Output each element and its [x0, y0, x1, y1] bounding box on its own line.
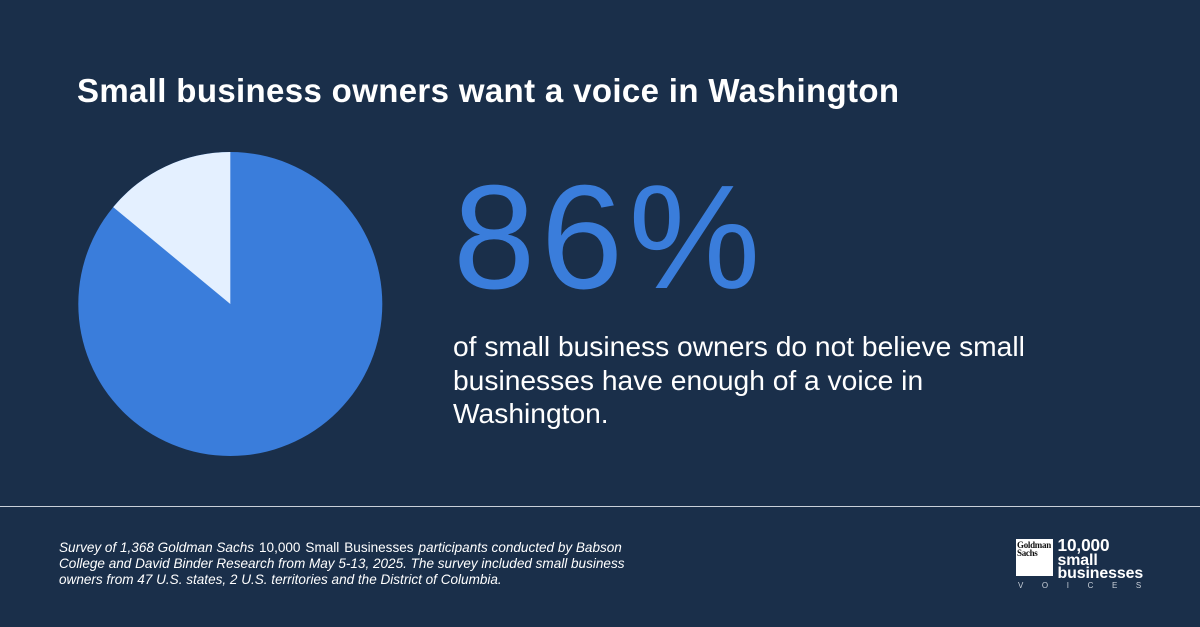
- statistic description: businesses have enough of a voice in: [453, 364, 923, 396]
- footnote: owners from 47 U.S. states, 2 U.S. territories and the District of Columbia.: [59, 572, 502, 587]
- statistic description: Washington.: [453, 397, 609, 429]
- statistic description: of small business owners do not believe small: [453, 330, 1025, 362]
- big statistic: 86%: [453, 155, 766, 320]
- logo: program name: businesses: [1058, 565, 1143, 582]
- statistic description: [453, 330, 1025, 429]
- logo: Goldman Sachs 10,000 Small Businesses Voices: [1016, 535, 1160, 590]
- footnote: College and David Binder Research from May 5-13, 2025. The survey included small business: [59, 556, 624, 571]
- footnote: [59, 540, 624, 587]
- logo: program name: 10,000: [1058, 535, 1109, 555]
- divider: [0, 506, 1200, 507]
- logo: voices: VOICES: [1018, 581, 1160, 590]
- logo: Goldman Sachs square: Goldman: [1017, 540, 1051, 550]
- logo: Goldman Sachs square: Sachs: [1017, 548, 1038, 558]
- logo: program name: small: [1058, 552, 1098, 568]
- footnote: Survey of 1,368 Goldman Sachs 10,000 Small Businesses participants conducted by Babson: [59, 540, 622, 555]
- logo: program name: [1058, 535, 1143, 582]
- logo: Goldman Sachs square: [1016, 539, 1053, 576]
- title: Small business owners want a voice in Washington: [77, 72, 899, 109]
- pie chart: 86%: [78, 152, 382, 456]
